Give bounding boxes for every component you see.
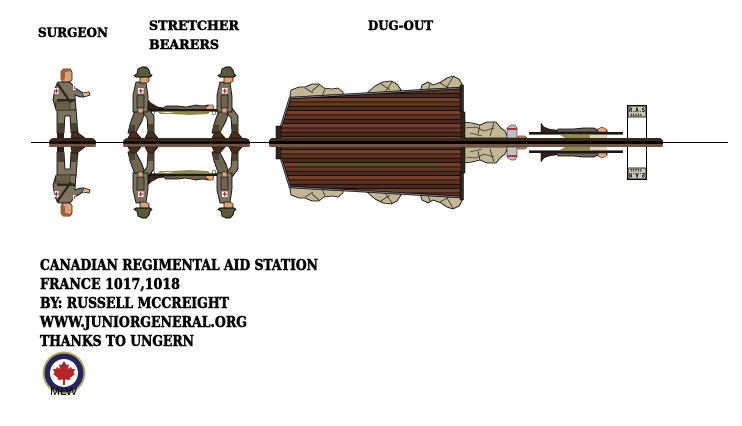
stretcher reflection [143,170,223,185]
stretcher bearers group [123,67,250,218]
sign label top [628,106,646,118]
stretcher base [123,138,250,147]
icon: canadian roundel: MLW [50,386,78,398]
sign label top: 11111 [630,114,643,118]
rear bearer reflection [128,147,158,218]
heading: surgeon: SURGEON [38,26,108,41]
surgeon base [49,138,96,147]
surgeon figure with mirrored reflection [49,69,96,216]
timber posts [276,85,465,200]
surgeon back [53,147,90,216]
surgeon front [53,69,90,138]
aid station sign [628,106,646,180]
front bearer [212,67,242,138]
sign label top: R.A.S [629,107,645,114]
ground fold line [31,142,728,143]
heading: stretcher bearers [149,19,239,53]
casualty and stretcher inside dug-out [507,123,623,162]
credit text block: WWW.JUNIORGENERAL.ORG [39,314,247,331]
sign label bottom: R.A.S [629,171,645,178]
credit text block: CANADIAN REGIMENTAL AID STATION [40,257,318,274]
roof planks [281,85,462,200]
dug-out [276,76,508,209]
heading: stretcher bearers: STRETCHER [149,19,239,34]
rear bearer [128,67,158,138]
credit text block [39,257,318,350]
heading: stretcher bearers: BEARERS [149,38,219,53]
credit text block: THANKS TO UNGERN [40,333,194,350]
icon: canadian roundel [42,352,86,398]
stretcher with casualty [143,100,223,115]
credit text block: BY: RUSSELL MCCREIGHT [40,295,229,312]
front bearer reflection [212,147,242,218]
sign label bottom: 11111 [630,167,643,171]
credit text block: FRANCE 1017,1018 [40,276,180,293]
sandbags [290,76,508,209]
heading: dug-out: DUG-OUT [368,19,433,34]
dug-out base bar [269,138,663,147]
sign label bottom [628,167,646,179]
